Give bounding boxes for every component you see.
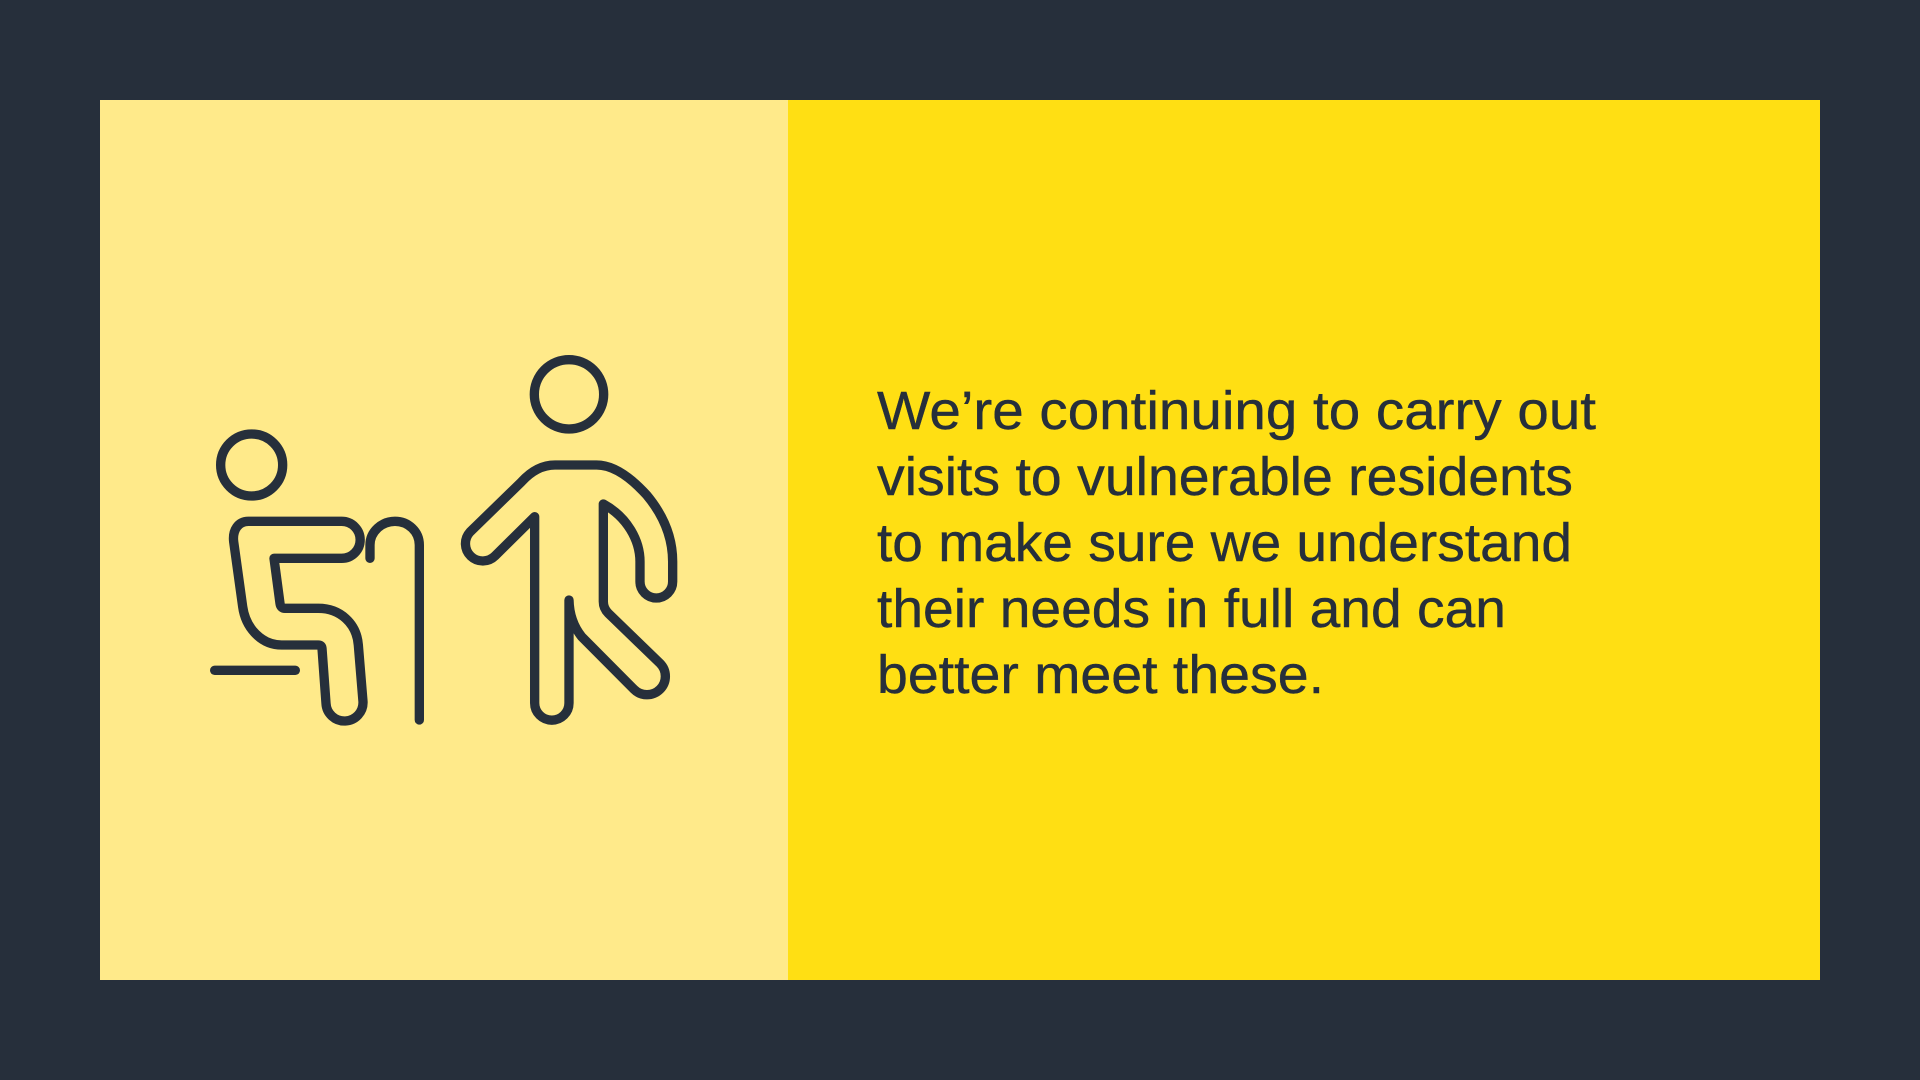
panel: pale yellow icon panel [100, 100, 788, 980]
icon: seated person head [221, 434, 283, 496]
icon: seated person with cane and standing person walking [215, 360, 673, 721]
text block: message: to make sure we understand [877, 513, 1572, 573]
text block: message [877, 381, 1596, 705]
text block: message: their needs in full and can [877, 579, 1506, 639]
icon: walking cane [370, 521, 419, 720]
text block: message: visits to vulnerable residents [877, 447, 1573, 507]
icon: standing person body [465, 465, 673, 720]
panel: bright yellow text panel [788, 100, 1820, 980]
icon: standing person head [534, 360, 604, 429]
icon: seated person body [233, 521, 363, 721]
text block: message: We’re continuing to carry out [877, 381, 1596, 441]
icon: seat line [215, 656, 295, 684]
text block: message: better meet these. [877, 645, 1324, 705]
